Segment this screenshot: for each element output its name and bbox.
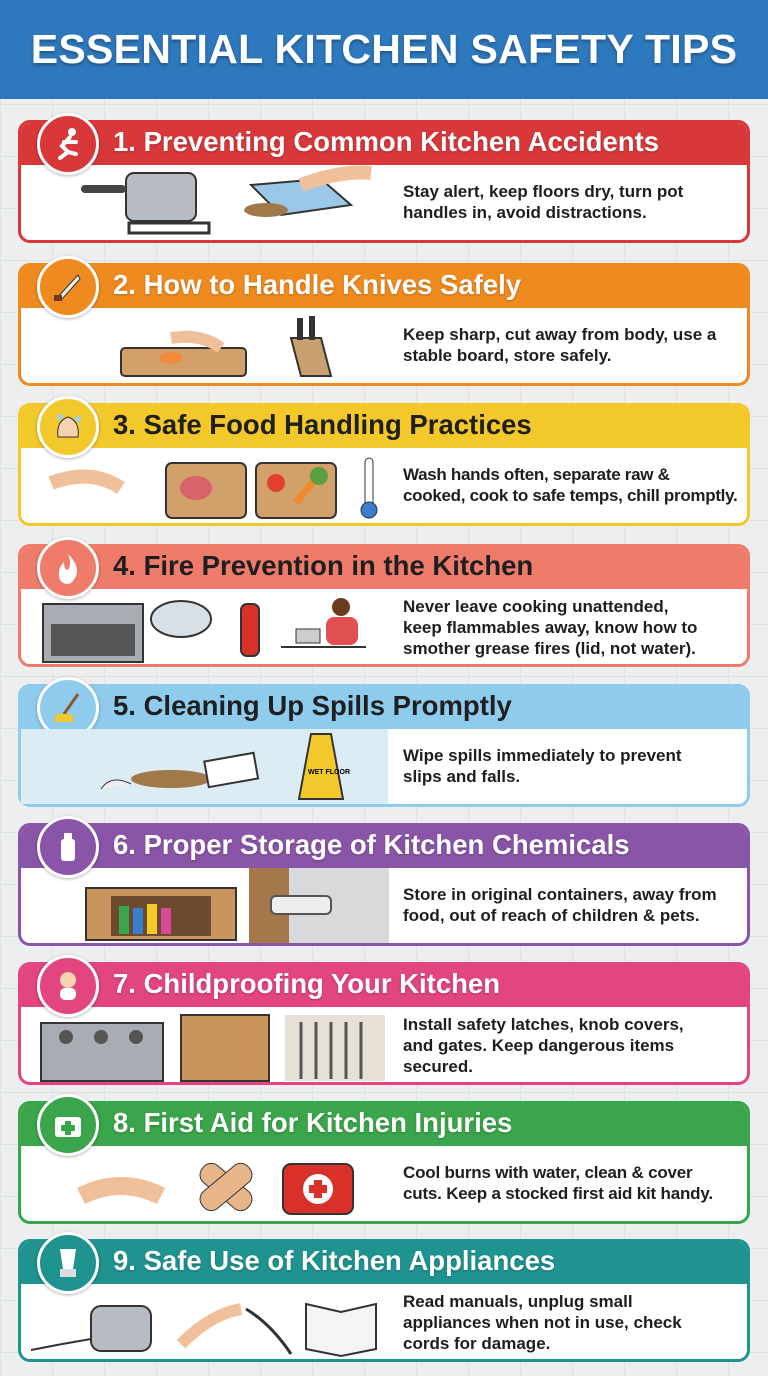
illustration: pot and towel — [81, 166, 372, 234]
illustration: hand, bandage, kit — [77, 1162, 354, 1215]
header 1: 1. Preventing Common Kitchen Accidents — [113, 126, 659, 157]
text 6 — [403, 885, 717, 925]
icon: mop — [37, 677, 99, 739]
text 3: Wash hands often, separate raw & — [403, 465, 670, 484]
text 9 — [403, 1292, 682, 1353]
text 8 — [403, 1163, 713, 1203]
text 6: food, out of reach of children & pets. — [403, 906, 700, 925]
header 5: 5. Cleaning Up Spills Promptly — [113, 690, 512, 721]
panel: 3 food handling — [18, 403, 750, 526]
text 6: Store in original containers, away from — [403, 885, 717, 904]
illustration: floor, mop, wet floor sign: WET FLOOR — [308, 769, 350, 776]
header 6: 6. Proper Storage of Kitchen Chemicals — [113, 829, 630, 860]
text 1 — [403, 182, 684, 222]
panel: 1 accidents — [18, 120, 750, 243]
text 7: and gates. Keep dangerous items — [403, 1036, 674, 1055]
icon: knife — [37, 256, 99, 318]
icon: first aid kit — [37, 1094, 99, 1156]
header 2 — [21, 266, 747, 308]
text 1: Stay alert, keep floors dry, turn pot — [403, 182, 683, 201]
header 7: 7. Childproofing Your Kitchen — [113, 968, 500, 999]
icon: hands washing — [37, 396, 99, 458]
icon: blender — [37, 1232, 99, 1294]
illustration: food boards — [48, 458, 378, 519]
text 9: Read manuals, unplug small — [403, 1292, 633, 1311]
header 3: 3. Safe Food Handling Practices — [113, 409, 532, 440]
header 5 — [21, 687, 747, 729]
header 9 — [21, 1242, 747, 1284]
panel: 2 knives — [18, 263, 750, 386]
text 1: handles in, avoid distractions. — [403, 203, 647, 222]
illustration: cabinet and latch — [85, 868, 389, 943]
text 4 — [403, 597, 697, 658]
text 2: Keep sharp, cut away from body, use a — [403, 325, 716, 344]
panel: 4 fire — [18, 544, 750, 667]
text 2 — [403, 325, 716, 365]
icon: flame — [37, 537, 99, 599]
title — [0, 0, 768, 99]
text 4: smother grease fires (lid, not water). — [403, 639, 696, 658]
text 9: cords for damage. — [403, 1334, 550, 1353]
header 3 — [21, 406, 747, 448]
text 4: keep flammables away, know how to — [403, 618, 697, 637]
header 8: 8. First Aid for Kitchen Injuries — [113, 1107, 512, 1138]
icon: baby — [37, 955, 99, 1017]
header 4 — [21, 547, 747, 589]
text 5 — [403, 746, 682, 786]
header 4: 4. Fire Prevention in the Kitchen — [113, 550, 533, 581]
text 2: stable board, store safely. — [403, 346, 611, 365]
header 7 — [21, 965, 747, 1007]
header 8 — [21, 1104, 747, 1146]
illustration: toaster, plug, manual — [30, 1302, 377, 1357]
text 4: Never leave cooking unattended, — [403, 597, 668, 616]
text 3: cooked, cook to safe temps, chill promptly. — [403, 486, 737, 505]
panel: 7 childproofing — [18, 962, 750, 1085]
icon: slip — [37, 113, 99, 175]
illustration: floor, mop, wet floor sign — [21, 729, 388, 804]
header 6 — [21, 826, 747, 868]
header 2: 2. How to Handle Knives Safely — [113, 269, 521, 300]
text 7 — [403, 1015, 684, 1076]
text 5: slips and falls. — [403, 767, 520, 786]
panel: 8 first aid — [18, 1101, 750, 1224]
text 3 — [403, 465, 737, 505]
illustration: stove, cabinet, gate — [40, 1014, 385, 1082]
panel: 9 appliances — [18, 1239, 750, 1362]
panel: 6 chemicals — [18, 823, 750, 946]
icon: bottle — [37, 816, 99, 878]
text 8: Cool burns with water, clean & cover — [403, 1163, 692, 1182]
text 9: appliances when not in use, check — [403, 1313, 682, 1332]
text 7: Install safety latches, knob covers, — [403, 1015, 684, 1034]
title: ESSENTIAL KITCHEN SAFETY TIPS — [31, 26, 737, 72]
text 8: cuts. Keep a stocked first aid kit handy. — [403, 1184, 713, 1203]
text 5: Wipe spills immediately to prevent — [403, 746, 682, 765]
illustration: stove, extinguisher, person — [42, 598, 366, 663]
panel: 5 spills — [18, 684, 750, 807]
text 7: secured. — [403, 1057, 473, 1076]
header 1 — [21, 123, 747, 165]
header 9: 9. Safe Use of Kitchen Appliances — [113, 1245, 555, 1276]
illustration: cutting board — [120, 316, 332, 377]
